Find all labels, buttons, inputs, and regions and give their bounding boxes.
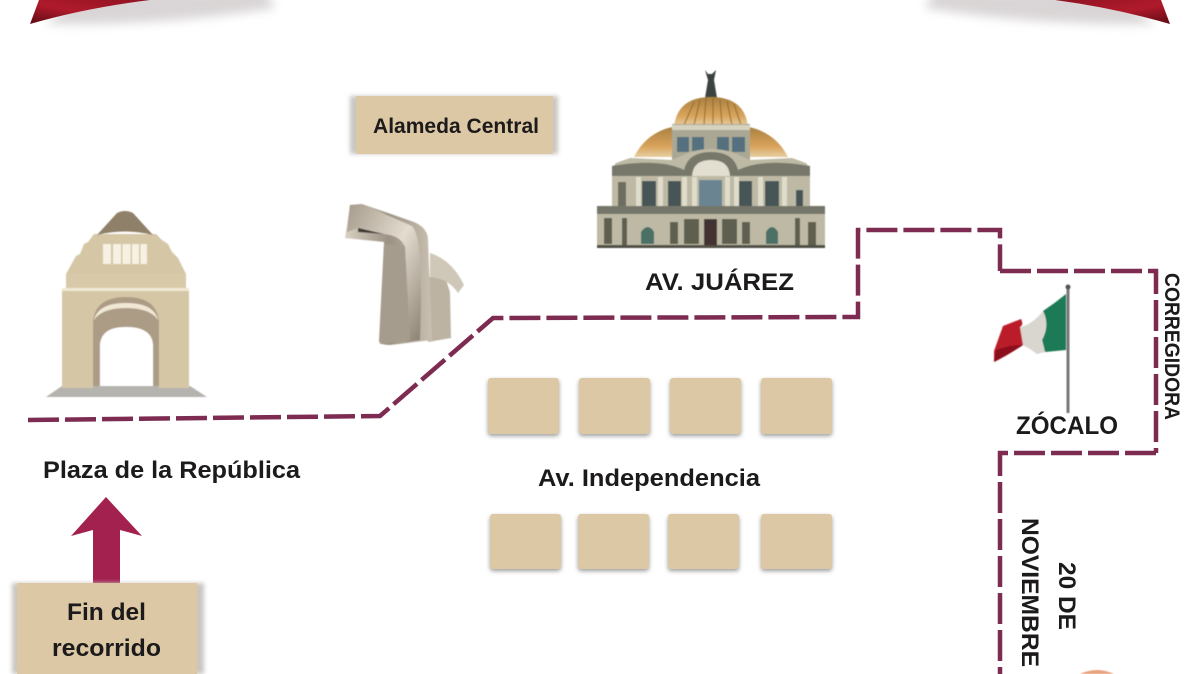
side domes bbox=[634, 127, 672, 157]
icon: El Caballito sculpture bbox=[345, 204, 464, 345]
blocks: lower row bbox=[490, 514, 832, 571]
next landmark fragment at bottom edge bbox=[1080, 670, 1114, 674]
label: Plaza de la República: Plaza de la República bbox=[43, 457, 301, 484]
icon: Mexican flag bbox=[994, 284, 1070, 413]
label box: Alameda Central: Alameda Central bbox=[373, 115, 539, 138]
label: 20 DE: 20 DE bbox=[1053, 562, 1080, 630]
top right ribbon bbox=[925, 0, 1170, 24]
main dome bbox=[674, 97, 748, 126]
label box: Fin del recorrido bbox=[12, 583, 204, 674]
label box: Fin del recorrido: recorrido bbox=[52, 635, 161, 662]
facade doors bbox=[641, 227, 654, 244]
top left ribbon bbox=[30, 0, 275, 24]
label box: Alameda Central bbox=[350, 96, 558, 154]
statue bbox=[705, 70, 717, 98]
label: ZÓCALO: ZÓCALO bbox=[1016, 410, 1118, 440]
route: dashed line bbox=[28, 230, 1156, 674]
windows bbox=[103, 244, 147, 264]
label: NOVIEMBRE: NOVIEMBRE bbox=[1016, 518, 1043, 667]
facade windows bbox=[618, 180, 803, 206]
blocks: upper row bbox=[488, 378, 832, 436]
arch bbox=[93, 297, 159, 388]
columns bbox=[636, 177, 787, 206]
label box: Fin del recorrido: Fin del bbox=[67, 599, 146, 626]
label: AV. JUÁREZ: AV. JUÁREZ bbox=[645, 268, 794, 296]
drum bbox=[672, 124, 750, 166]
icon: Palacio de Bellas Artes bbox=[597, 70, 825, 248]
icon: Monumento a la Revolución bbox=[46, 211, 207, 397]
dome cap bbox=[97, 211, 153, 235]
arrow: to end of route bbox=[71, 497, 142, 586]
label: CORREGIDORA: CORREGIDORA bbox=[1160, 273, 1183, 420]
label: Av. Independencia: Av. Independencia bbox=[538, 465, 761, 492]
facade bbox=[597, 149, 825, 248]
